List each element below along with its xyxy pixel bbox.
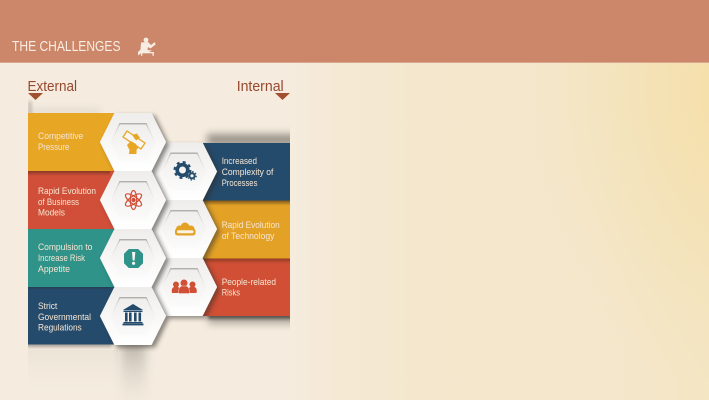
label: Rapid Evolution of Business Models: [38, 186, 96, 218]
bar separator shadows: [28, 171, 110, 290]
label: Increased Complexity of Processes: Complexity of: [222, 167, 274, 177]
label: Compulsion to Increase Risk Appetite: Increase Risk: [38, 253, 85, 263]
label: Competitive Pressure: [38, 131, 83, 152]
label: Rapid Evolution of Business Models: of Business: [38, 197, 79, 207]
label: Compulsion to Increase Risk Appetite: Compulsion to: [38, 242, 92, 252]
panel: left column bars: [28, 113, 120, 344]
panel: right column bars: [195, 143, 290, 316]
label: Rapid Evolution of Technology: [222, 220, 280, 241]
label: Strict Governmental Regulations: Strict: [38, 301, 58, 311]
icon: hand with banner: [123, 131, 145, 154]
label: Increased Complexity of Processes: Increased: [222, 156, 257, 166]
label: Strict Governmental Regulations: Governmental: [38, 312, 91, 322]
bar: Compulsion to Increase Risk Appetite: [28, 229, 120, 287]
bar: People-related Risks: [195, 258, 290, 316]
marker: External arrow: [28, 93, 43, 100]
label: Competitive Pressure: Pressure: [38, 142, 69, 152]
right hexagon shadows: [154, 145, 220, 318]
bar: Rapid Evolution of Technology: [195, 200, 290, 258]
label: Compulsion to Increase Risk Appetite: Appetite: [38, 264, 70, 274]
bar labels: [38, 131, 280, 332]
label: People-related Risks: [222, 277, 276, 298]
icon: hurdler: [138, 38, 156, 56]
label: Rapid Evolution of Business Models: Models: [38, 208, 65, 218]
bar separator shadows: [200, 200, 290, 264]
bar: Strict Governmental Regulations: [28, 287, 120, 344]
label: Competitive Pressure: Competitive: [38, 131, 83, 141]
hexagon: People-related Risks: [152, 259, 216, 315]
icon: atom: [124, 190, 143, 210]
title: THE CHALLENGES: [12, 39, 121, 55]
icon: people: [172, 279, 197, 294]
hexagon: Strict Governmental Regulations: [101, 288, 165, 344]
hexagon: Competitive Pressure: [101, 114, 165, 170]
label: People-related Risks: People-related: [222, 277, 276, 287]
label: Rapid Evolution of Technology: of Technology: [222, 231, 275, 241]
label: Increased Complexity of Processes: Processes: [222, 178, 258, 188]
header band: [0, 0, 709, 63]
bar: Competitive Pressure: [28, 113, 120, 171]
bar: Rapid Evolution of Business Models: [28, 171, 120, 229]
icon: warning octagon: [124, 250, 142, 268]
hexagon: Increased Complexity of Processes: [152, 144, 216, 200]
heading: External: External: [28, 79, 77, 95]
icon: government building: [122, 304, 144, 325]
bar: Increased Complexity of Processes: [195, 143, 290, 200]
panel shadows: [28, 100, 290, 388]
hexagon: Rapid Evolution of Business Models: [101, 172, 165, 228]
marker: Internal arrow: [275, 93, 290, 100]
left hexagon shadows: [103, 116, 169, 348]
label: Compulsion to Increase Risk Appetite: [38, 242, 92, 274]
label: Increased Complexity of Processes: [222, 156, 274, 188]
icon: gears: [174, 162, 196, 180]
icon: cloud: [175, 222, 196, 236]
hexagon: Rapid Evolution of Technology: [152, 201, 216, 257]
label: Rapid Evolution of Technology: Rapid Evolution: [222, 220, 280, 230]
label: People-related Risks: Risks: [222, 288, 240, 298]
label: Strict Governmental Regulations: Regulations: [38, 322, 82, 332]
label: Strict Governmental Regulations: [38, 301, 91, 332]
heading: Internal: Internal: [237, 79, 284, 95]
hexagon: Compulsion to Increase Risk Appetite: [101, 230, 165, 286]
label: Rapid Evolution of Business Models: Rapid Evolution: [38, 186, 96, 196]
